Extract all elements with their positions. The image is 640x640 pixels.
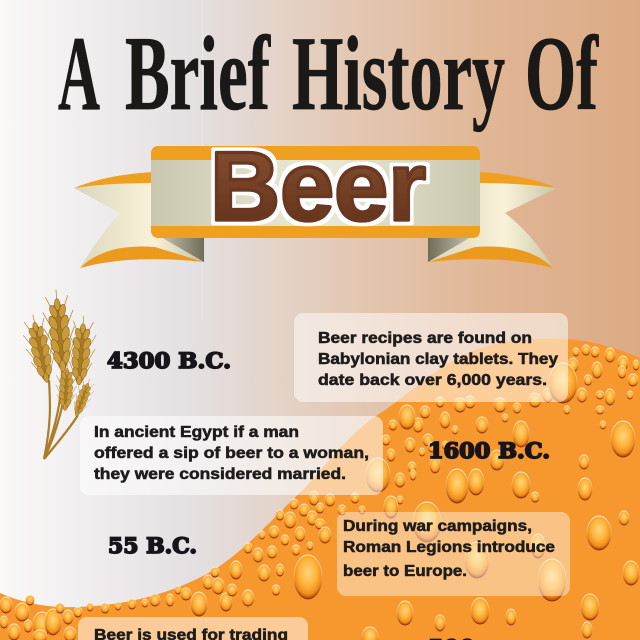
card text <box>318 330 558 389</box>
left ribbon tail <box>74 172 204 268</box>
card text: beer to Europe. <box>343 563 467 580</box>
title <box>58 15 599 132</box>
card text: Beer recipes are found on <box>318 330 532 347</box>
title: History <box>292 15 505 132</box>
ribbon centre band <box>151 146 480 238</box>
card text: Roman Legions introduce <box>343 539 555 556</box>
card text: they were considered married. <box>94 466 346 483</box>
card <box>337 512 570 596</box>
title: A <box>58 15 100 132</box>
card text <box>343 518 555 580</box>
title: Of <box>525 15 599 132</box>
beer liquid <box>0 339 640 640</box>
card text: Babylonian clay tablets. They <box>318 351 558 368</box>
year: 1600 B.C. <box>428 438 550 463</box>
right ribbon tail <box>428 172 557 268</box>
card text: offered a sip of beer to a woman, <box>94 445 369 462</box>
card text: During war campaigns, <box>343 518 532 535</box>
panel: 1600 B.C. <box>80 416 550 495</box>
card <box>80 416 383 495</box>
card <box>294 313 568 402</box>
card text: In ancient Egypt if a man <box>94 424 299 441</box>
beer wave with bubbles <box>0 339 640 640</box>
word Beer: Beer <box>210 131 426 241</box>
panel: 500 <box>78 617 475 640</box>
panel: 4300 B.C. <box>107 313 568 402</box>
year: 55 B.C. <box>108 533 197 558</box>
bubbles <box>0 345 639 640</box>
title: Brief <box>125 15 271 132</box>
ribbon folds <box>152 232 204 262</box>
ribbon banner <box>74 131 557 268</box>
card text: date back over 6,000 years. <box>318 372 547 389</box>
card <box>78 617 308 640</box>
wheat stalks icon <box>19 288 97 459</box>
card text <box>94 424 369 483</box>
year: 4300 B.C. <box>107 348 231 373</box>
panel: 55 B.C. <box>108 512 570 596</box>
